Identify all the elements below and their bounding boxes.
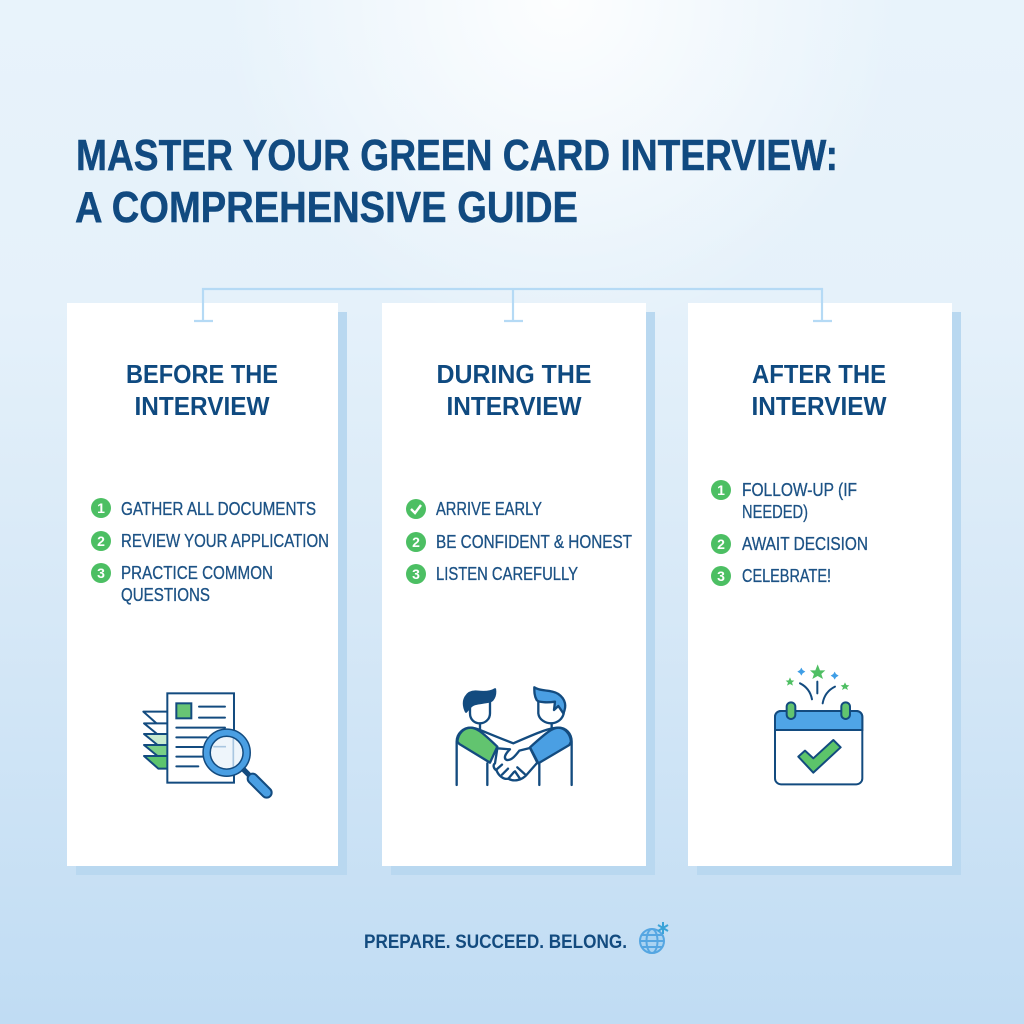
list item: await decision: AWAIT DECISION	[742, 534, 868, 554]
connector bracket	[194, 289, 832, 321]
list item 3	[91, 563, 273, 605]
heading: during: DURING THE	[436, 359, 592, 389]
list item: celebrate: 3	[717, 568, 725, 584]
list item: follow-up	[711, 480, 857, 522]
icon: handshake	[457, 687, 572, 785]
list item 1: 1	[97, 500, 105, 516]
list item 3: PRACTICE COMMON	[121, 563, 273, 583]
list item 3: 3	[97, 565, 105, 581]
panel: during the interview	[382, 303, 655, 875]
title: MASTER YOUR GREEN CARD INTERVIEW:	[76, 131, 838, 180]
heading: before: BEFORE THE	[126, 359, 278, 389]
icon: documents and magnifying glass	[143, 693, 267, 793]
list item: follow-up: 1	[717, 482, 725, 498]
list item: listen carefully: LISTEN CAREFULLY	[436, 564, 578, 584]
list item: celebrate: CELEBRATE!	[742, 566, 831, 586]
panel: before the interview	[67, 303, 347, 875]
list item: celebrate	[711, 566, 831, 586]
title	[75, 131, 838, 232]
tagline: PREPARE. SUCCEED. BELONG.	[364, 932, 627, 953]
panel: after the interview: INTERVIEW	[752, 391, 887, 421]
list item: be confident: 2	[412, 534, 420, 550]
list item 2: REVIEW YOUR APPLICATION	[121, 531, 329, 551]
list item: follow-up: NEEDED)	[742, 502, 808, 522]
panel: after the interview	[688, 303, 961, 875]
list item 1: GATHER ALL DOCUMENTS	[121, 499, 316, 519]
list item: listen carefully: 3	[412, 566, 420, 582]
title: A COMPREHENSIVE GUIDE	[75, 183, 578, 232]
heading: after: AFTER THE	[752, 359, 886, 389]
icon: calendar with check and stars	[775, 664, 862, 784]
list item: arrive early: ARRIVE EARLY	[436, 499, 542, 519]
list item 2: 2	[97, 533, 105, 549]
list item: be confident: BE CONFIDENT & HONEST	[436, 532, 632, 552]
panel: during the interview: INTERVIEW	[446, 391, 582, 421]
list item: follow-up: FOLLOW-UP (IF	[742, 480, 857, 500]
list item 3: QUESTIONS	[121, 585, 210, 605]
list item: arrive early	[406, 499, 542, 519]
list item: await decision: 2	[717, 536, 725, 552]
icon: globe with star	[640, 922, 668, 953]
panel: before the interview: INTERVIEW	[134, 391, 270, 421]
